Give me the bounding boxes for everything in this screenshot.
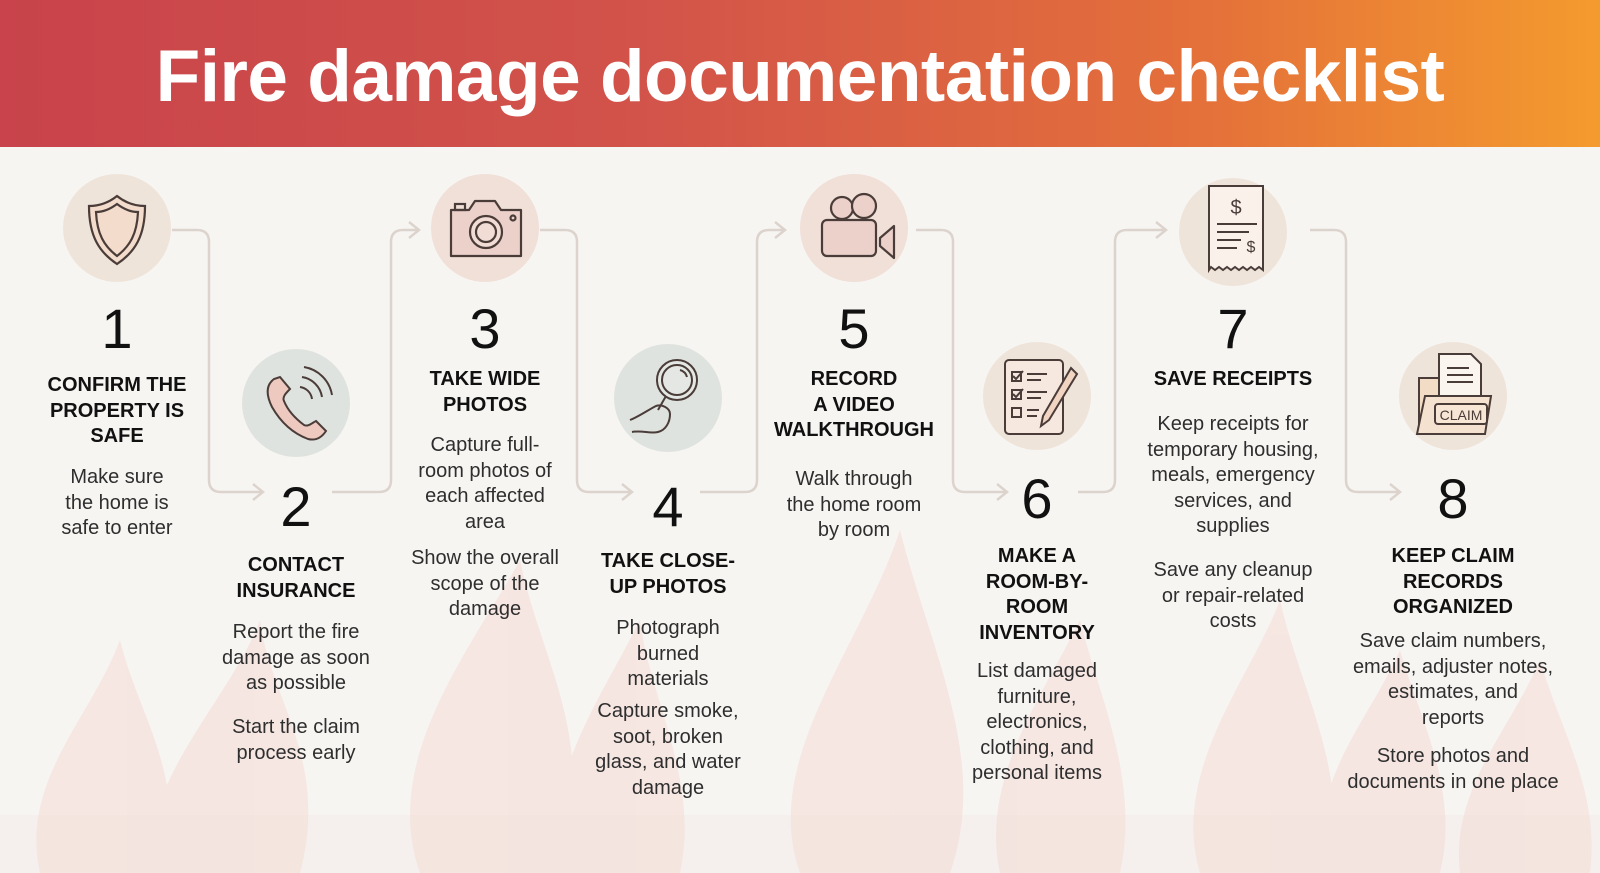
title 5: WALKTHROUGH [774,419,934,441]
title 1: PROPERTY IS [50,400,184,422]
icon: claim folder: CLAIM [1440,407,1482,423]
title 6: INVENTORY [979,622,1095,644]
title 6: MAKE A [998,545,1076,567]
body 2b [232,716,360,764]
body 6: furniture, [998,686,1076,708]
title 1: SAFE [90,425,144,447]
title 2 [237,554,355,602]
step 4 [595,344,741,798]
title 2: INSURANCE [237,580,355,602]
body 8: Save claim numbers, [1360,630,1546,652]
body 1: safe to enter [61,517,173,539]
body 2: as possible [246,672,346,694]
body 3b: scope of the [431,572,539,594]
title 2: CONTACT [248,554,344,576]
title 6 [979,545,1095,644]
body 5: by room [818,519,890,541]
body 8: emails, adjuster notes, [1353,656,1553,678]
body 7: temporary housing, [1147,438,1319,460]
number 8: 8 [1437,467,1469,530]
title 4 [601,550,735,598]
title 8 [1392,545,1514,618]
number 4: 4 [652,475,684,538]
step 1 [48,174,186,539]
step 6 [972,342,1102,784]
body 4b: Capture smoke, [597,700,739,722]
icon: receipt: $ [1230,197,1242,219]
title: Fire damage documentation checklist [156,36,1444,117]
icon: checklist [983,342,1091,450]
body 4b [595,700,741,798]
body 7: meals, emergency [1151,464,1315,486]
body 7: supplies [1196,515,1270,537]
body 6: electronics, [986,711,1088,733]
step 3 [411,174,559,620]
step 8 [1347,342,1559,792]
body 2b: Start the claim [232,716,360,738]
icon: magnifier [614,344,722,452]
body 3: each affected [425,485,545,507]
body 2b: process early [237,742,355,764]
body 2 [222,621,370,694]
body 3b: damage [449,598,521,620]
body 5: the home room [787,494,921,516]
body 6 [972,660,1102,784]
title 3: PHOTOS [443,394,527,416]
body 7b: Save any cleanup [1153,559,1312,581]
title 3: TAKE WIDE [430,368,540,390]
title 8: RECORDS [1403,570,1503,592]
title 3 [430,368,540,416]
title 6: ROOM-BY- [986,570,1088,592]
body 8b [1347,745,1559,792]
body 1: the home is [65,492,169,514]
body 7b: costs [1210,610,1256,632]
body 4b: glass, and water [595,751,741,773]
title 7: SAVE RECEIPTS [1154,368,1312,390]
body 4 [616,617,720,690]
body 6: clothing, and [980,736,1094,758]
body 8b: documents in one place [1347,770,1559,792]
number 1: 1 [101,297,133,360]
body 8: reports [1422,706,1484,728]
title 5 [774,368,934,441]
icon: camera [431,174,539,282]
title 5: A VIDEO [813,394,895,416]
body 3: area [465,510,505,532]
body 8: estimates, and [1388,681,1518,703]
number 7: 7 [1217,297,1249,360]
icon: receipt: $ [1247,239,1256,256]
body 3b: Show the overall [411,547,559,569]
body 4: burned [637,642,699,664]
body 4: materials [627,668,709,690]
body 4b: damage [632,776,704,798]
body 6: personal items [972,762,1102,784]
body 3: room photos of [418,460,552,482]
title 1 [48,374,186,447]
title 4: TAKE CLOSE- [601,550,735,572]
title 6: ROOM [1006,596,1068,618]
title 8: ORGANIZED [1393,596,1513,618]
body 7b: or repair-related [1162,584,1304,606]
title 4: UP PHOTOS [609,576,727,598]
body 4b: soot, broken [613,726,723,748]
step 2 [222,349,370,764]
body 1: Make sure [70,466,164,488]
icon: shield [63,174,171,282]
icon: receipt [1179,178,1287,286]
body 2: Report the fire [233,621,359,643]
step 7 [1147,178,1319,632]
body 3: Capture full- [431,434,539,456]
body 5 [787,468,921,541]
title 5: RECORD [811,368,897,390]
body 8b: Store photos and [1377,745,1529,767]
step 5 [774,174,934,541]
body 1 [61,466,173,539]
icon: video camera [800,174,908,282]
number 3: 3 [469,297,501,360]
body 3 [418,434,552,532]
body 7: Keep receipts for [1157,413,1309,435]
title 8: KEEP CLAIM [1392,545,1514,567]
body 4: Photograph [616,617,720,639]
title 1: CONFIRM THE [48,374,186,396]
body 6: List damaged [977,660,1097,682]
icon: phone [242,349,350,457]
body 3b [411,547,559,620]
body 7: services, and [1174,490,1292,512]
body 5: Walk through [795,468,913,490]
number 2: 2 [280,475,312,538]
body 7 [1147,413,1319,537]
body 2: damage as soon [222,646,370,668]
number 6: 6 [1021,467,1053,530]
icon: claim folder [1399,342,1507,450]
body 7b [1153,559,1312,632]
number 5: 5 [838,297,870,360]
header [0,0,1600,147]
body 8 [1353,630,1553,728]
